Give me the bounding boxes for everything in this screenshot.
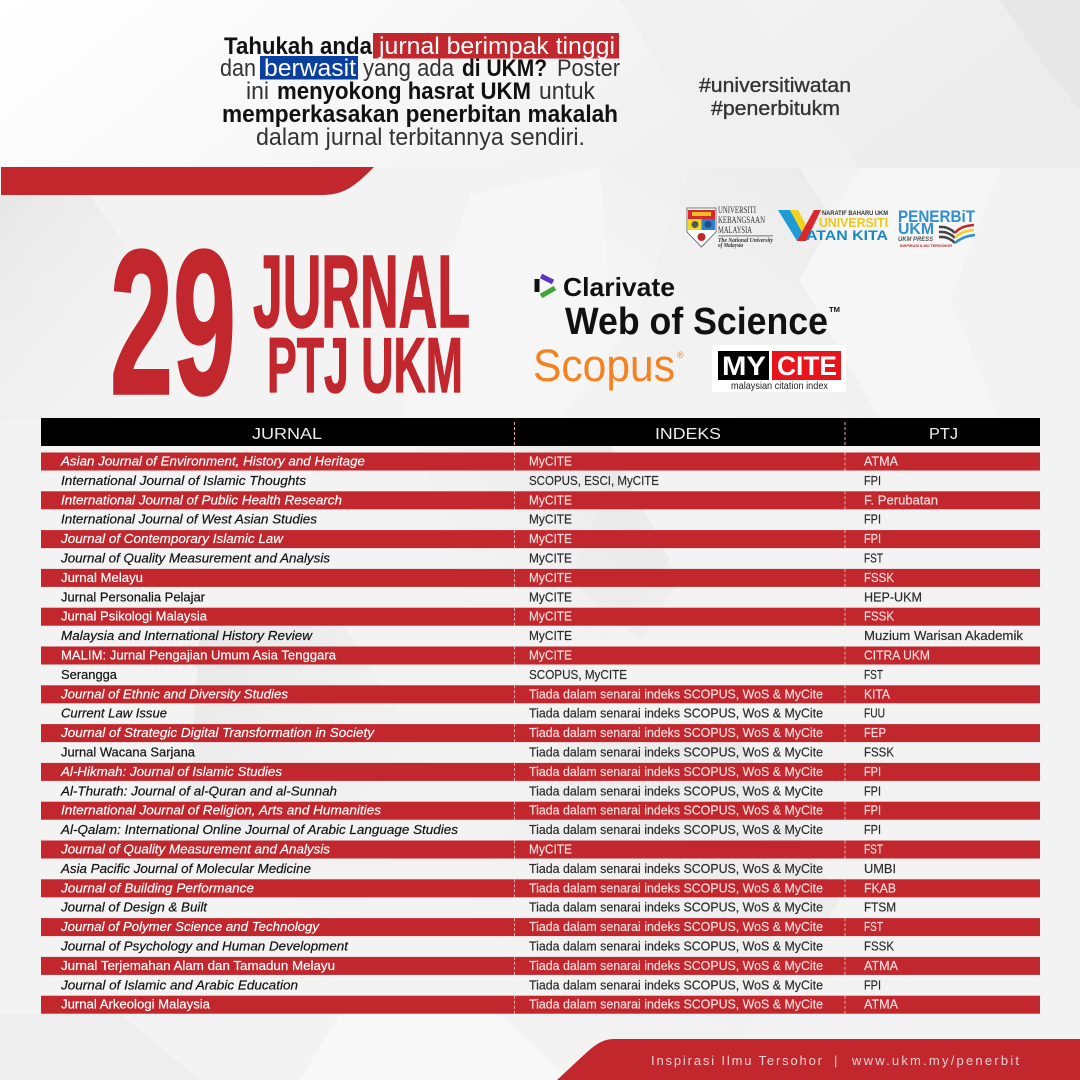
hashtag 1: #universitiwatan: [699, 75, 851, 97]
icon: UKM crest: [687, 208, 716, 247]
row 9: MyCITE: [529, 610, 572, 624]
row 14: FUU: [864, 707, 885, 721]
logo: Universiti Watan Kita: UNIVERSITI: [819, 216, 888, 230]
row 27: Tiada dalam senarai indeks SCOPUS, WoS & MyCite: [529, 959, 823, 973]
row 17: [41, 763, 1040, 781]
row 10: [41, 627, 1040, 645]
row 11: [41, 646, 1040, 664]
row 3: International Journal of Public Health Research: [61, 493, 342, 507]
row 17: FPI: [864, 765, 881, 779]
row 23: FKAB: [864, 881, 896, 895]
logo: Scopus: Scopus: [533, 340, 675, 391]
logo: Scopus: ®: [677, 350, 684, 360]
row 16: [41, 744, 1040, 762]
row 6: Journal of Quality Measurement and Analysis: [60, 552, 330, 566]
row 27: [41, 957, 1040, 975]
row 6: FST: [864, 552, 883, 566]
logo: Penerbit UKM: PENERBiT: [898, 208, 975, 226]
row 12: [41, 666, 1040, 684]
line 4: memperkasakan penerbitan makalah: [222, 101, 618, 128]
row 13: KITA: [864, 687, 891, 701]
row 3: F. Perubatan: [864, 493, 938, 507]
row 17: Al-Hikmah: Journal of Islamic Studies: [60, 765, 282, 779]
row 6: MyCITE: [529, 552, 572, 566]
logo: UKM: [687, 205, 773, 249]
row 1: Asian Journal of Environment, History and Heritage: [60, 454, 365, 468]
logo: MyCite: MY: [722, 351, 766, 381]
row 12: Serangga: [61, 668, 117, 682]
row 1: MyCITE: [529, 454, 572, 468]
row 29: [41, 996, 1040, 1014]
row 4: International Journal of West Asian Studies: [61, 513, 317, 527]
row 7: FSSK: [864, 571, 895, 585]
line 2: dan: [220, 55, 256, 82]
row 27: ATMA: [864, 959, 899, 973]
row 27: Jurnal Terjemahan Alam dan Tamadun Melayu: [61, 959, 335, 973]
row 13: [41, 685, 1040, 703]
row 9: Jurnal Psikologi Malaysia: [61, 610, 207, 624]
table header: [41, 418, 1040, 446]
logo: Universiti Watan Kita: NARATIF BAHARU UKM: [822, 211, 888, 217]
row 4: [41, 511, 1040, 529]
row 20: [41, 821, 1040, 839]
line 3: untuk: [539, 78, 596, 105]
row 2: SCOPUS, ESCI, MyCITE: [529, 474, 659, 488]
line 1: jurnal berimpak tinggi: [378, 33, 615, 60]
line 1: Tahukah anda: [224, 33, 373, 60]
table: [41, 418, 1040, 1014]
row 22: Tiada dalam senarai indeks SCOPUS, WoS & MyCite: [529, 862, 823, 876]
big number 29: 29: [110, 208, 236, 438]
row 25: [41, 918, 1040, 936]
row 3: MyCITE: [529, 493, 572, 507]
row 8: Jurnal Personalia Pelajar: [61, 590, 205, 604]
table header: INDEKS: [655, 426, 721, 443]
row 26: [41, 938, 1040, 956]
row 20: FPI: [864, 823, 881, 837]
row 17: Tiada dalam senarai indeks SCOPUS, WoS & MyCite: [529, 765, 823, 779]
logo: Universiti Watan Kita: ATAN KITA: [806, 227, 888, 243]
row 15: Tiada dalam senarai indeks SCOPUS, WoS & MyCite: [529, 726, 823, 740]
UKM wordmark: MALAYSIA: [718, 225, 752, 235]
row 26: Tiada dalam senarai indeks SCOPUS, WoS & MyCite: [529, 940, 823, 954]
row 10: Malaysia and International History Review: [61, 629, 313, 643]
row 21: MyCITE: [529, 842, 572, 856]
row 18: FPI: [864, 784, 881, 798]
line 2: di UKM?: [462, 55, 547, 82]
row 15: Journal of Strategic Digital Transformation in Society: [60, 726, 375, 740]
row 8: [41, 588, 1040, 606]
UKM wordmark: KEBANGSAAN: [718, 215, 765, 225]
hashtags: [699, 75, 851, 120]
row 7: MyCITE: [529, 571, 572, 585]
row 11: CITRA UKM: [864, 648, 930, 662]
row 25: Journal of Polymer Science and Technology: [60, 920, 320, 934]
row 19: Tiada dalam senarai indeks SCOPUS, WoS & MyCite: [529, 804, 823, 818]
row 1: ATMA: [864, 454, 899, 468]
table header: JURNAL: [252, 426, 322, 443]
row 28: Journal of Islamic and Arabic Education: [60, 978, 298, 992]
row 4: FPI: [864, 513, 881, 527]
row 5: MyCITE: [529, 532, 572, 546]
logo: MyCite: CITE: [777, 351, 837, 381]
line 2: berwasit: [264, 55, 356, 82]
line 2: Poster: [557, 55, 620, 82]
icon: Clarivate mark: [537, 276, 555, 296]
line 3: menyokong hasrat UKM: [277, 78, 531, 105]
UKM wordmark: [718, 205, 773, 249]
row 29: Tiada dalam senarai indeks SCOPUS, WoS & MyCite: [529, 998, 823, 1012]
row 24: Tiada dalam senarai indeks SCOPUS, WoS & MyCite: [529, 901, 823, 915]
row 9: [41, 608, 1040, 626]
row 16: Jurnal Wacana Sarjana: [61, 746, 195, 760]
logo: MyCite: malaysian citation index: [731, 380, 829, 392]
footer url: www.ukm.my/penerbit: [851, 1053, 1019, 1068]
row 8: MyCITE: [529, 590, 572, 604]
row 25: FST: [864, 920, 883, 934]
row 1: [41, 452, 1040, 470]
logo: Web of Science: Web of Science: [565, 301, 828, 343]
row 24: FTSM: [864, 901, 896, 915]
row 12: SCOPUS, MyCITE: [529, 668, 627, 682]
row 22: [41, 860, 1040, 878]
icon: W mark: [778, 210, 821, 241]
row 11: MALIM: Jurnal Pengajian Umum Asia Tenggara: [61, 648, 336, 662]
row 5: [41, 530, 1040, 548]
row 18: Al-Thurath: Journal of al-Quran and al-Sunnah: [60, 784, 337, 798]
row 19: [41, 802, 1040, 820]
row 8: HEP-UKM: [864, 590, 922, 604]
title: 29 Jurnal PTJ UKM: [110, 208, 470, 438]
footer tagline: Inspirasi Ilmu Tersohor: [651, 1053, 823, 1068]
highlight: blue box: [260, 56, 358, 80]
row 7: [41, 569, 1040, 587]
row 23: Journal of Building Performance: [60, 881, 254, 895]
footer separator: |: [834, 1053, 837, 1068]
row 13: Tiada dalam senarai indeks SCOPUS, WoS & MyCite: [529, 687, 823, 701]
row 4: MyCITE: [529, 513, 572, 527]
logo: Clarivate: Clarivate: [563, 272, 675, 302]
row 6: [41, 550, 1040, 568]
row 20: Al-Qalam: International Online Journal of Arabic Language Studies: [60, 823, 458, 837]
row 26: Journal of Psychology and Human Development: [60, 940, 349, 954]
logo: Penerbit UKM: UKM: [898, 221, 934, 238]
UKM wordmark: UNIVERSITI: [718, 205, 756, 215]
footer red shape: [557, 1039, 1080, 1080]
JURNAL: JURNAL: [253, 234, 470, 349]
row 13: Journal of Ethnic and Diversity Studies: [60, 687, 288, 701]
row 15: [41, 724, 1040, 742]
row 18: Tiada dalam senarai indeks SCOPUS, WoS & MyCite: [529, 784, 823, 798]
row 28: Tiada dalam senarai indeks SCOPUS, WoS & MyCite: [529, 978, 823, 992]
row 26: FSSK: [864, 940, 895, 954]
row 21: FST: [864, 842, 883, 856]
row 25: Tiada dalam senarai indeks SCOPUS, WoS & MyCite: [529, 920, 823, 934]
row 5: FPI: [864, 532, 881, 546]
row 19: International Journal of Religion, Arts and Humanities: [61, 804, 381, 818]
row 16: FSSK: [864, 746, 895, 760]
row 23: [41, 879, 1040, 897]
logo: Web of Science: TM: [829, 307, 840, 314]
UKM wordmark: The National University: [718, 238, 773, 244]
row 16: Tiada dalam senarai indeks SCOPUS, WoS & MyCite: [529, 746, 823, 760]
row 24: [41, 899, 1040, 917]
row 18: [41, 782, 1040, 800]
row 22: UMBI: [864, 862, 896, 876]
row 14: Tiada dalam senarai indeks SCOPUS, WoS & MyCite: [529, 707, 823, 721]
row 29: Jurnal Arkeologi Malaysia: [61, 998, 210, 1012]
row 15: FEP: [864, 726, 886, 740]
row 7: Jurnal Melayu: [61, 571, 143, 585]
logo: MyCite: [712, 345, 846, 392]
row 3: [41, 491, 1040, 509]
row 21: Journal of Quality Measurement and Analysis: [60, 842, 330, 856]
row 22: Asia Pacific Journal of Molecular Medicine: [60, 862, 311, 876]
row 2: [41, 472, 1040, 490]
row 19: FPI: [864, 804, 881, 818]
row 29: ATMA: [864, 998, 899, 1012]
logo: Universiti Watan Kita: [778, 210, 888, 243]
row 14: Current Law Issue: [61, 707, 167, 721]
row 10: MyCITE: [529, 629, 572, 643]
intro text block: [220, 33, 620, 151]
hashtag 2: #penerbitukm: [711, 98, 840, 120]
line 3: ini: [246, 78, 269, 105]
row 10: Muzium Warisan Akademik: [864, 629, 1024, 643]
PTJ UKM: PTJ UKM: [267, 321, 463, 409]
logo: Penerbit UKM: [898, 208, 975, 248]
row 9: FSSK: [864, 610, 895, 624]
row 20: Tiada dalam senarai indeks SCOPUS, WoS & MyCite: [529, 823, 823, 837]
row 12: FST: [864, 668, 883, 682]
line 5: dalam jurnal terbitannya sendiri.: [256, 124, 585, 151]
row 5: Journal of Contemporary Islamic Law: [60, 532, 284, 546]
row 11: MyCITE: [529, 648, 572, 662]
row 23: Tiada dalam senarai indeks SCOPUS, WoS & MyCite: [529, 881, 823, 895]
row 14: [41, 705, 1040, 723]
logo: Penerbit UKM: UKM PRESS: [898, 237, 933, 243]
table header: PTJ: [929, 426, 958, 443]
row 28: FPI: [864, 978, 881, 992]
logo: Penerbit UKM: INSPIRASI ILMU TERSOHOR: [900, 243, 952, 248]
icon: book: [939, 225, 975, 243]
row 24: Journal of Design & Built: [60, 901, 208, 915]
row 28: [41, 976, 1040, 994]
highlight: red box: [373, 33, 619, 58]
UKM wordmark: of Malaysia: [718, 243, 743, 249]
row 2: International Journal of Islamic Thoughts: [61, 474, 306, 488]
row 2: FPI: [864, 474, 881, 488]
top red banner shape: [1, 167, 374, 195]
row 21: [41, 840, 1040, 858]
line 2: yang ada: [363, 55, 455, 82]
